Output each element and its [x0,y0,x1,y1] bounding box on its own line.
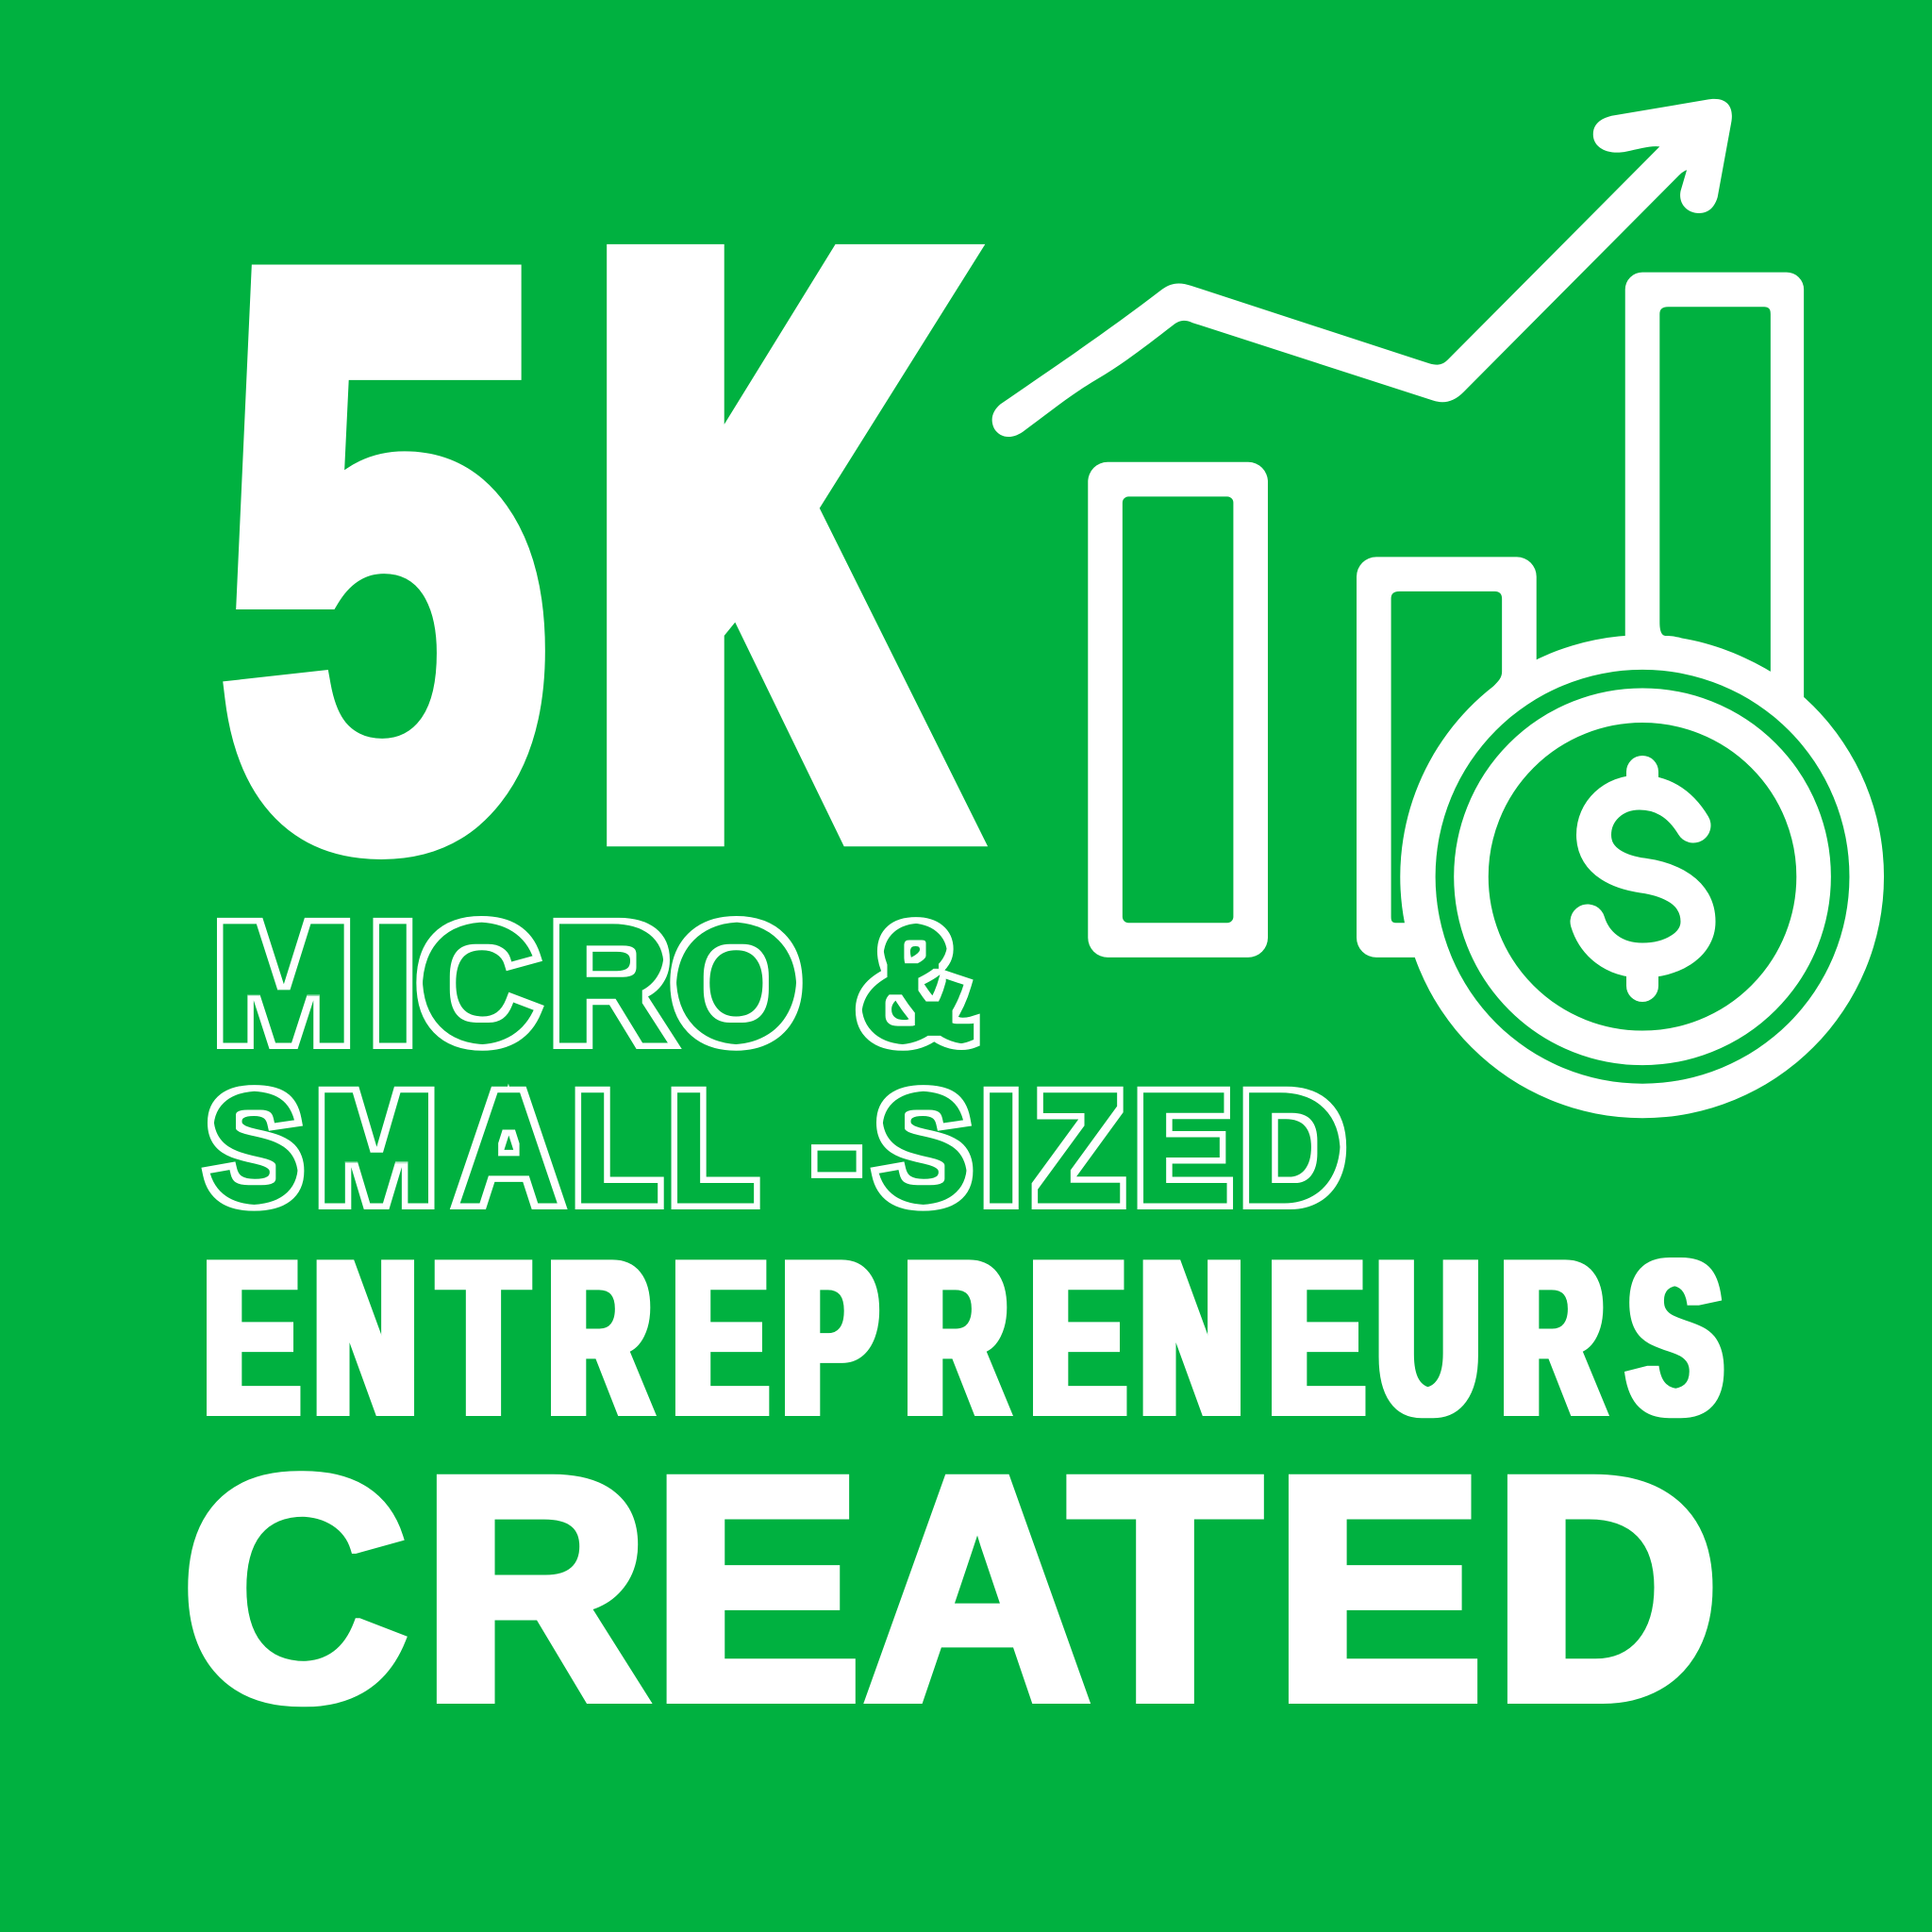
outlined text: MICRO &: MICRO & [213,889,977,1077]
headline number: 5K: 5 [219,107,549,1006]
icon: rising arrow line [992,99,1732,437]
icon: growth chart with dollar coin [992,99,1884,1118]
heading: CREATED: CREATED [182,1410,1720,1768]
icon: bars and coin silhouette [1357,273,1884,1118]
headline number: 5K: K [600,119,941,968]
icon: tall bar interior [1659,307,1771,672]
icon: coin rings [1436,670,1849,1084]
outlined text: SMALL-SIZED: SMALL -SIZED [206,1060,1345,1235]
icon: left bar [1088,462,1268,958]
icon: dollar sign [1588,772,1698,986]
heading: ENTREPRENEURS: ENTREPRENEURS [205,1217,1722,1460]
headline number: 5K [219,107,941,1006]
icon: middle bar interior [1391,591,1502,923]
